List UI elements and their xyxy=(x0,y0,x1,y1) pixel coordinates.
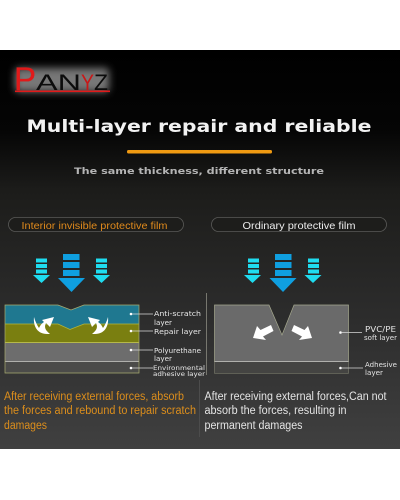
description: interior film: the forces and rebound to repair scratch xyxy=(4,405,196,417)
description: ordinary film: permanent damages xyxy=(204,420,303,432)
description: ordinary film xyxy=(204,391,387,432)
layer labels: interior film: Repair layer xyxy=(154,328,201,336)
icon: down arrows xyxy=(244,254,322,292)
background panel xyxy=(0,50,400,449)
layer labels: ordinary film xyxy=(339,325,397,377)
icon: rebound arrows xyxy=(34,317,108,334)
description: interior film xyxy=(4,391,196,432)
heading pill: interior film xyxy=(8,218,184,232)
title: Multi-layer repair and reliable xyxy=(26,117,372,137)
description: interior film: After receiving external forces, absorb xyxy=(4,391,184,403)
description: ordinary film: absorb the forces, resulting in xyxy=(204,405,346,417)
logo: Panyz: AN xyxy=(36,70,81,95)
layer labels: interior film xyxy=(130,310,205,378)
layer labels: interior film: Environmental xyxy=(153,364,205,372)
layer diagram: ordinary film xyxy=(206,293,348,375)
logo: Panyz: Y xyxy=(81,70,94,95)
logo: Panyz: P xyxy=(14,61,36,97)
heading pill: interior film: Interior invisible protective film xyxy=(22,220,168,232)
layer labels: ordinary film: soft layer xyxy=(364,334,397,342)
logo: Panyz xyxy=(14,61,110,97)
layer labels: ordinary film: layer xyxy=(365,369,383,377)
panel: interior film xyxy=(4,218,205,432)
orange divider xyxy=(127,150,272,154)
icon: down arrows xyxy=(33,254,110,292)
layer labels: ordinary film: PVC/PE xyxy=(365,325,396,334)
layer labels: interior film: layer xyxy=(154,319,172,327)
heading pill: ordinary film xyxy=(212,218,386,232)
logo: Panyz: Z xyxy=(94,70,108,95)
layer labels: ordinary film: Adhesive xyxy=(365,361,397,369)
description: interior film: damages xyxy=(4,420,47,432)
layer labels: interior film: Polyurethane xyxy=(154,347,201,355)
layer labels: interior film: adhesive layer xyxy=(153,370,205,378)
subtitle: The same thickness, different structure xyxy=(74,167,324,177)
panel: ordinary film xyxy=(204,218,397,432)
layer labels: interior film: layer xyxy=(154,355,172,363)
heading pill: ordinary film: Ordinary protective film xyxy=(242,220,356,232)
icon: deflected arrows xyxy=(253,325,312,340)
layer labels: interior film: Anti-scratch xyxy=(154,310,201,318)
layer diagram: interior film xyxy=(5,305,139,373)
description: ordinary film: After receiving external forces,Can not xyxy=(204,391,387,403)
